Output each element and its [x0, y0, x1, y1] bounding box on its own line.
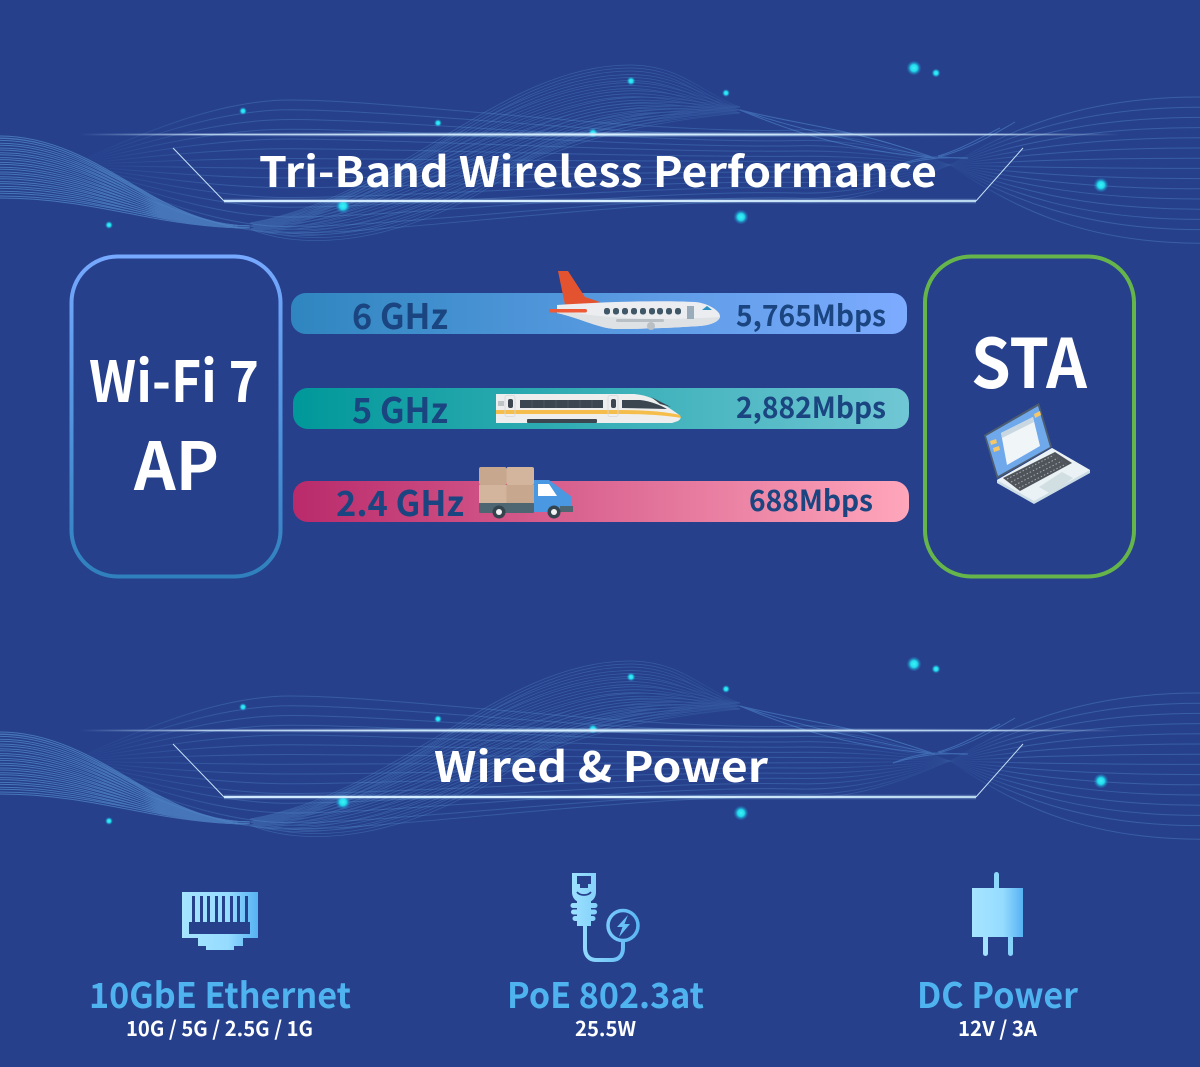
heading: Wired & Power: Wired & Power	[434, 734, 769, 795]
icon: PoE cable with bolt	[570, 873, 638, 960]
label: Wi-Fi 7: Wi-Fi 7	[89, 337, 259, 419]
subtitle: voltage: 12V / 3A	[958, 1012, 1038, 1042]
icon: power adapter	[972, 872, 1023, 956]
value: 5,765Mbps: 5,765Mbps	[736, 293, 886, 335]
bar: 6 GHz	[291, 271, 907, 340]
icon: train	[496, 394, 681, 423]
heading: Tri-Band Wireless Performance: Tri-Band Wireless Performance	[259, 139, 937, 200]
value: 688Mbps: 688Mbps	[749, 478, 873, 520]
label: 2.4 GHz: 2.4 GHz	[336, 476, 464, 527]
label: AP: AP	[133, 414, 219, 510]
feature: DC Power	[917, 872, 1079, 1042]
banner decoration: wireless section	[0, 60, 1200, 243]
value: 2,882Mbps: 2,882Mbps	[736, 385, 886, 427]
subtitle: speeds: 10G / 5G / 2.5G / 1G	[126, 1012, 313, 1042]
title: PoE 802.3at: PoE 802.3at	[507, 968, 704, 1019]
icon: delivery truck	[479, 467, 573, 518]
banner decoration: wired section	[0, 656, 1200, 839]
feature: 10GbE Ethernet	[89, 892, 351, 1042]
bar: 5 GHz	[293, 383, 909, 434]
feature: PoE 802.3at	[507, 873, 704, 1042]
icon: ethernet port	[182, 892, 258, 950]
title: DC Power: DC Power	[917, 968, 1079, 1019]
icon: airplane	[549, 271, 720, 330]
panel: STA	[925, 256, 1134, 576]
label: 6 GHz: 6 GHz	[352, 289, 448, 340]
icon: laptop	[984, 403, 1090, 504]
subtitle: wattage: 25.5W	[575, 1012, 636, 1042]
title: 10GbE Ethernet: 10GbE Ethernet	[89, 968, 351, 1019]
label: 5 GHz: 5 GHz	[352, 383, 448, 434]
panel: Wi-Fi 7 AP	[72, 256, 280, 576]
bar: 2.4 GHz	[293, 467, 909, 527]
label: STA: STA	[971, 309, 1087, 408]
